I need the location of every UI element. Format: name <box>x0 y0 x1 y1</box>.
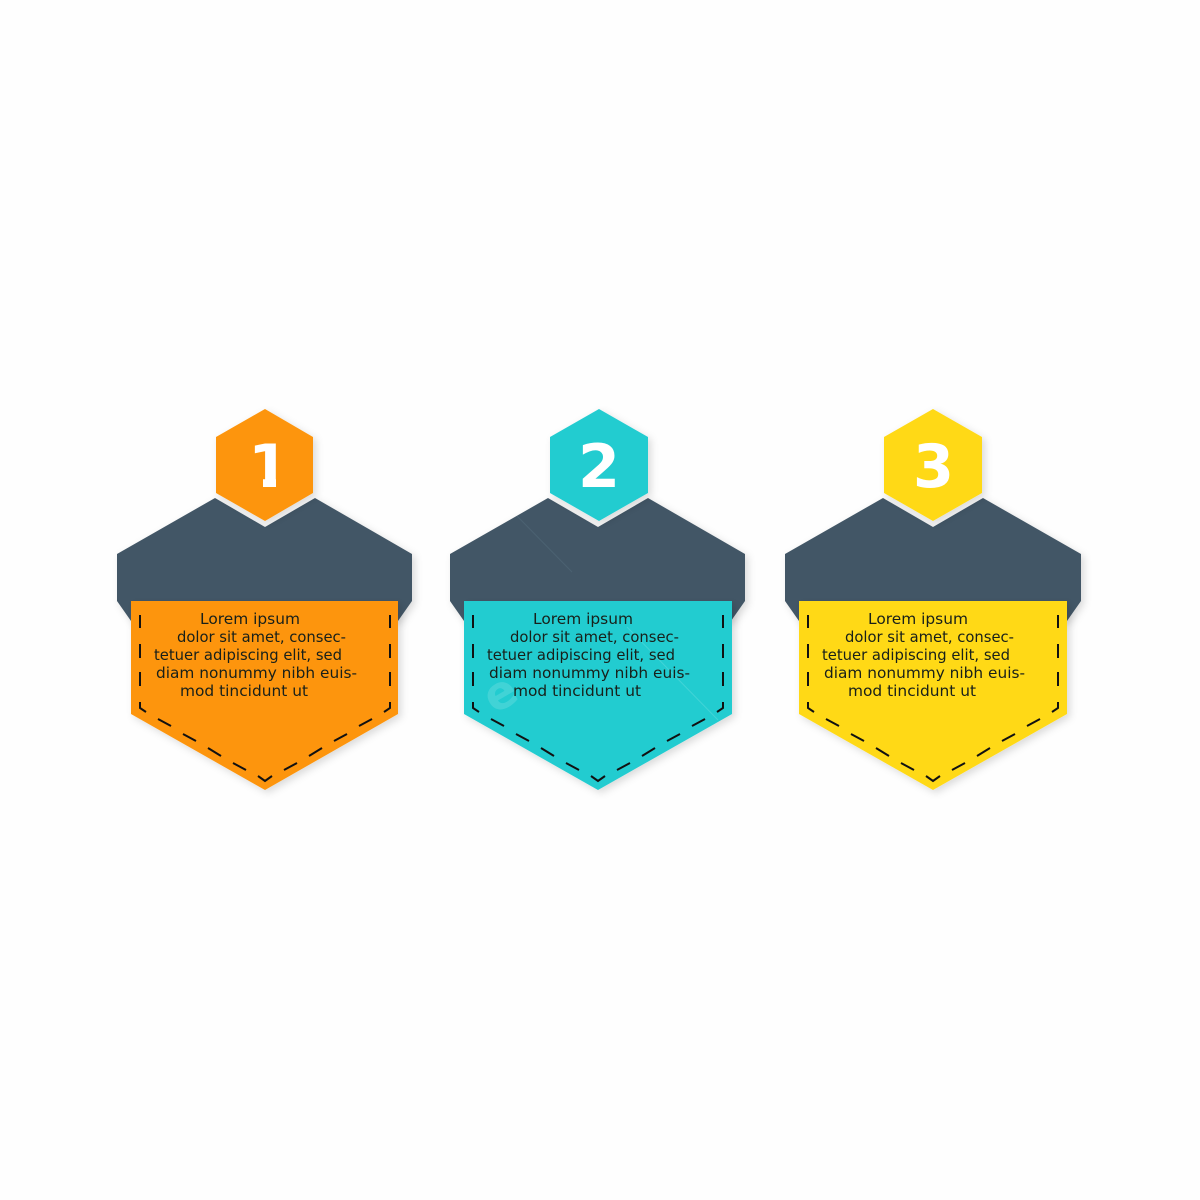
body text: Lorem ipsum <box>533 610 633 628</box>
number 1: 1 <box>248 432 290 502</box>
body text: Lorem ipsum <box>200 610 300 628</box>
number hexagon <box>550 409 648 521</box>
dark hexagon backing <box>450 498 745 621</box>
body text <box>487 610 690 700</box>
panel: step 2 <box>450 409 745 790</box>
number hexagon <box>884 409 982 521</box>
number 2: 2 <box>578 432 620 502</box>
pocket <box>131 601 398 790</box>
faint crease line <box>517 516 572 572</box>
body text: tetuer adipiscing elit, sed <box>154 646 342 664</box>
body text: dolor sit amet, consec- <box>177 628 346 646</box>
dashed stitching <box>473 615 723 781</box>
body text: diam nonummy nibh euis- <box>824 664 1025 682</box>
panel: step 1 <box>117 409 412 790</box>
dashed stitching <box>140 615 390 781</box>
body text: dolor sit amet, consec- <box>845 628 1014 646</box>
body text: mod tincidunt ut <box>513 682 641 700</box>
number 3: 3 <box>913 432 954 502</box>
dark hexagon backing <box>117 498 412 621</box>
body text: diam nonummy nibh euis- <box>489 664 690 682</box>
dashed stitching <box>808 615 1058 781</box>
faint watermark: e <box>473 662 527 724</box>
body text: mod tincidunt ut <box>180 682 308 700</box>
number hexagon <box>216 409 313 521</box>
dark hexagon backing <box>785 498 1081 621</box>
body text <box>822 610 1025 700</box>
body text: dolor sit amet, consec- <box>510 628 679 646</box>
body text: Lorem ipsum <box>868 610 968 628</box>
body text: mod tincidunt ut <box>848 682 976 700</box>
pocket <box>799 601 1067 790</box>
body text: tetuer adipiscing elit, sed <box>822 646 1010 664</box>
panel: step 3 <box>785 409 1081 790</box>
pocket <box>464 601 732 790</box>
body text: diam nonummy nibh euis- <box>156 664 357 682</box>
body text: tetuer adipiscing elit, sed <box>487 646 675 664</box>
faint watermark <box>473 627 718 724</box>
body text <box>154 610 357 700</box>
